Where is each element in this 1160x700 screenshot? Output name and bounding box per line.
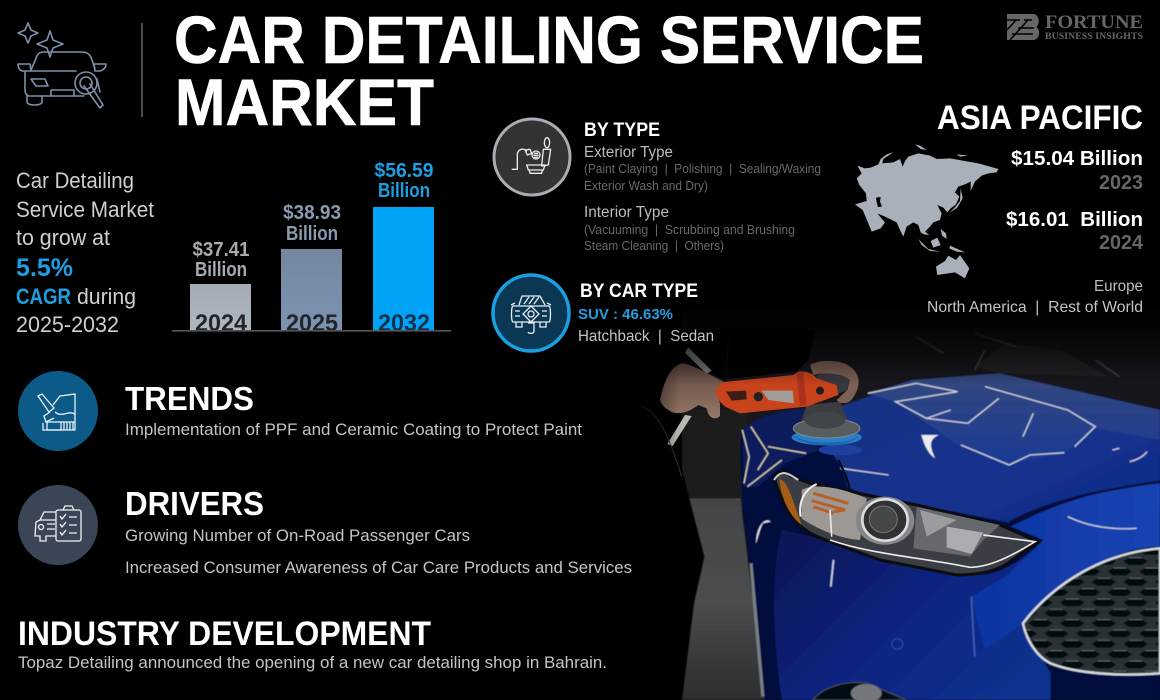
text block: CAGR statement: 5.5%	[16, 254, 73, 282]
icon: by type seat cleaning	[494, 119, 570, 195]
panel: by type: Steam Cleaning | Others)	[584, 238, 724, 253]
panel: drivers: DRIVERS	[125, 485, 264, 522]
headlight	[774, 460, 1038, 575]
panel: trends	[125, 380, 582, 439]
photo: detailer polishing a blue car	[617, 300, 1160, 700]
panel: Asia Pacific: North America | Rest of World	[927, 299, 1143, 316]
panel: trends: Implementation of PPF and Ceramic Coating to Protect Paint	[125, 420, 582, 439]
text block: CAGR statement	[16, 168, 154, 337]
panel: by car type: Hatchback | Sedan	[578, 328, 714, 345]
map: Asia Pacific	[855, 144, 998, 278]
panel: by car type	[578, 281, 714, 345]
text block: CAGR statement: during	[77, 284, 136, 309]
polisher and hands	[617, 330, 862, 477]
panel: Asia Pacific: ASIA PACIFIC	[937, 99, 1143, 137]
panel: Asia Pacific: 2023	[1099, 172, 1143, 194]
panel: Asia Pacific: 2024	[1099, 232, 1144, 254]
title: MARKET	[175, 65, 434, 139]
text block: CAGR statement: CAGR	[16, 284, 71, 309]
panel: industry development: Topaz Detailing announced the opening of a new car detailing shop in Bahrain.	[18, 653, 607, 672]
panel: by type: (Vacuuming | Scrubbing and Brushing	[584, 222, 795, 237]
panel: by type: BY TYPE	[584, 120, 660, 141]
panel: by type: Exterior Type	[584, 144, 673, 161]
bar 2032	[373, 160, 434, 337]
icon: by car type	[493, 275, 569, 351]
bar 2025	[281, 202, 342, 337]
panel: Asia Pacific: $15.04 Billion	[1011, 148, 1143, 170]
title: CAR DETAILING SERVICE	[174, 3, 924, 78]
panel: drivers: Increased Consumer Awareness of Car Care Products and Services	[125, 558, 632, 577]
text block: CAGR statement: Service Market	[16, 197, 154, 222]
bar 2032: Billion	[378, 180, 430, 202]
bar 2025: 2025	[286, 310, 338, 337]
panel: industry development	[18, 615, 607, 672]
panel: by type: (Paint Claying | Polishing | Sealing/Waxing	[584, 161, 821, 176]
bar 2024: Billion	[195, 259, 247, 281]
bar 2025: $38.93	[283, 202, 341, 224]
bar 2032: 2032	[378, 310, 430, 337]
bar 2024: 2024	[195, 310, 248, 337]
bar 2024	[190, 239, 251, 337]
bar 2024: $37.41	[192, 239, 250, 261]
panel: by type: Interior Type	[584, 204, 669, 221]
bar chart: market size	[172, 160, 451, 337]
panel: Asia Pacific	[927, 99, 1144, 316]
panel: Asia Pacific: Europe	[1094, 278, 1143, 295]
title	[174, 3, 924, 139]
panel: by car type: SUV : 46.63%	[578, 306, 673, 323]
bar 2032: $56.59	[374, 160, 434, 182]
text block: CAGR statement: to grow at	[16, 225, 110, 250]
panel: trends: TRENDS	[125, 380, 254, 417]
panel: drivers	[125, 485, 632, 577]
panel: by car type: BY CAR TYPE	[580, 281, 698, 302]
person lower body	[617, 380, 704, 700]
text block: CAGR statement: 2025-2032	[16, 312, 119, 337]
icon: drivers	[18, 485, 98, 565]
logo: Fortune Business Insights: FORTUNE	[1045, 12, 1143, 33]
header divider	[141, 23, 143, 117]
panel: by type: Exterior Wash and Dry)	[584, 178, 708, 193]
header icon: car with polisher and sparkles	[18, 23, 106, 108]
panel: industry development: INDUSTRY DEVELOPMENT	[18, 615, 431, 653]
icon: trends	[18, 371, 98, 451]
bar 2025: Billion	[286, 223, 338, 245]
text block: CAGR statement: Car Detailing	[16, 168, 134, 193]
panel: Asia Pacific: $16.01 Billion	[1006, 209, 1143, 231]
logo: Fortune Business Insights	[1007, 12, 1143, 42]
panel: by type	[584, 120, 821, 253]
logo: Fortune Business Insights: BUSINESS INSIGHTS	[1045, 32, 1143, 42]
panel: drivers: Growing Number of On-Road Passenger Cars	[125, 526, 470, 545]
